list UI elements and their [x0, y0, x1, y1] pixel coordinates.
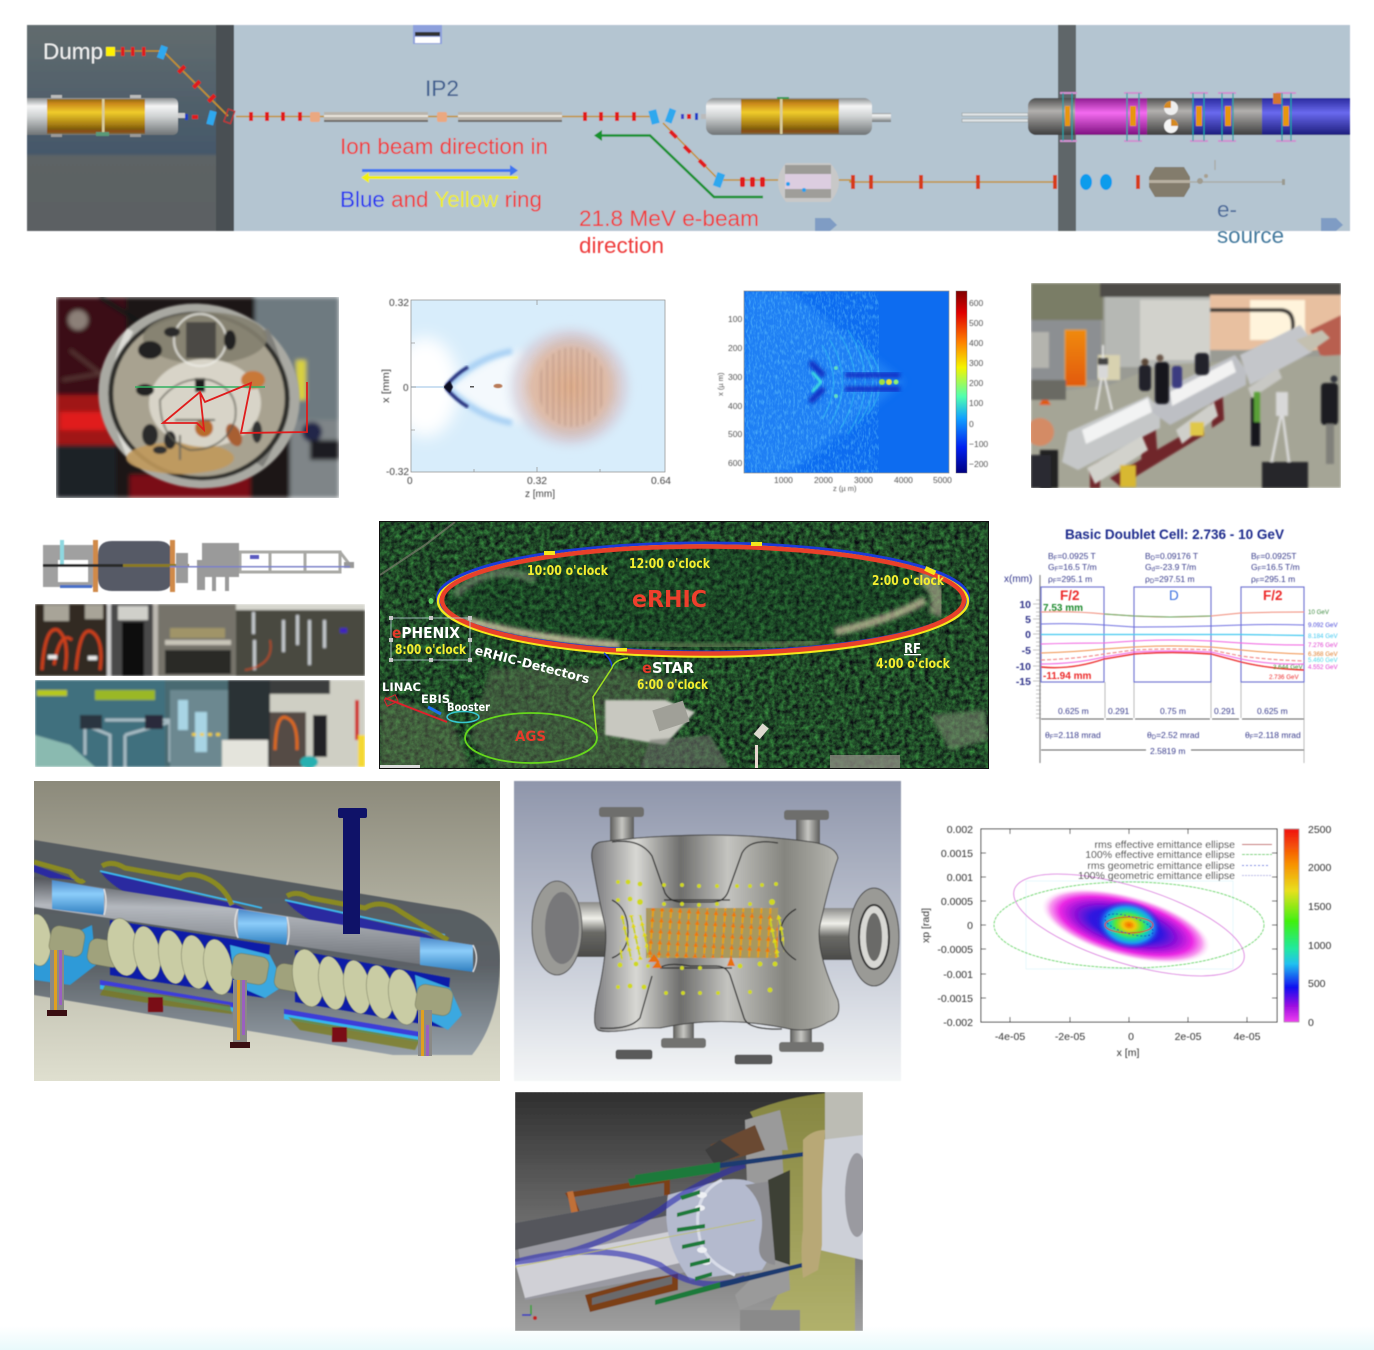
- dimension labels: θ: [1045, 730, 1050, 740]
- map labels: 4:00 o'clock: [876, 657, 950, 672]
- axis labels: 300: [969, 358, 983, 368]
- cad render: magnet and collimator assembly: [515, 1092, 869, 1331]
- cavity cold mass supports: [34, 920, 462, 1050]
- magnet parameters: =295.1 m: [1260, 574, 1295, 584]
- y axis labels: 0.0005: [941, 896, 973, 908]
- chamber flange: [96, 302, 301, 490]
- field image: [744, 291, 949, 473]
- colorbar labels: 2500: [1308, 824, 1332, 836]
- magnet labels: D: [1169, 588, 1179, 603]
- cad background: [515, 1092, 863, 1331]
- axis labels: -5: [1022, 645, 1031, 657]
- superconducting gun cryostat: [778, 163, 839, 202]
- x axis labels: 4e-05: [1234, 1031, 1261, 1043]
- coupler strips: [616, 1050, 772, 1064]
- silver magnet modules: [1062, 325, 1330, 487]
- energy labels: [1269, 609, 1338, 681]
- y axis labels: 0.002: [947, 824, 973, 836]
- blue beam envelopes: [515, 1165, 745, 1284]
- magnet parameters: ρ: [1145, 574, 1150, 584]
- magnet parameters: B: [1048, 551, 1054, 561]
- icon: slide page markers: [815, 218, 1343, 231]
- cryomodule: right with magenta and blue sections: [962, 98, 1350, 135]
- axis labels: 0: [403, 383, 409, 394]
- energy labels: 10 GeV: [1308, 609, 1330, 616]
- dimension labels: [1045, 706, 1301, 756]
- x axis labels: [995, 1031, 1261, 1059]
- laser path arrows: [135, 382, 307, 433]
- axis triad icon: [522, 1305, 537, 1320]
- axis labels: 0.32: [527, 476, 547, 487]
- magnet parameters: G: [1145, 562, 1152, 572]
- orbit traces: [1041, 612, 1304, 670]
- axis labels: 3000: [854, 475, 873, 485]
- cavity cells: [23, 913, 454, 1027]
- axis labels: 100: [969, 398, 983, 408]
- bottom pale band: [0, 1326, 1374, 1350]
- magnet parameters: ρ: [1048, 574, 1053, 584]
- dimension labels: θ: [1245, 730, 1250, 740]
- axis labels: 400: [969, 338, 983, 348]
- support posts: [47, 950, 432, 1056]
- y axis labels: -0.0015: [937, 993, 973, 1005]
- dimension labels: 0.291: [1214, 706, 1236, 716]
- axis labels: x [mm]: [381, 369, 392, 403]
- cad render: crab cavity with field vectors: [514, 781, 901, 1081]
- dimension labels: F: [1250, 735, 1254, 741]
- axis labels: [716, 298, 988, 493]
- label: Dump: Dump: [43, 39, 103, 64]
- gray structure behind: [705, 1092, 869, 1331]
- e-beam transport line: [663, 123, 1057, 189]
- label: e-source: e-: [1217, 197, 1237, 222]
- label: direction: direction: [579, 233, 664, 258]
- axis labels: 2000: [814, 475, 833, 485]
- schematic background: [27, 25, 1350, 231]
- dimension labels: 0.625 m: [1058, 706, 1089, 716]
- dimension labels: F: [1050, 735, 1054, 741]
- dimension labels: 2.5819 m: [1150, 746, 1185, 756]
- vessel: [98, 541, 172, 591]
- hall panorama: [35, 680, 365, 768]
- axis labels: 10: [1019, 599, 1031, 611]
- plot frame and ticks: [981, 829, 1277, 1022]
- ring: yellow: [438, 546, 968, 656]
- cad background: [34, 781, 500, 1081]
- map labels: AGS: [515, 729, 546, 745]
- magnet parameters: =16.5 T/m: [1058, 562, 1097, 572]
- energy labels: 7.276 GeV: [1308, 642, 1338, 649]
- axis labels: 500: [969, 318, 983, 328]
- colorbar labels: 2000: [1308, 862, 1332, 874]
- magnet parameters: F: [1054, 556, 1058, 562]
- x axis labels: 0: [1128, 1031, 1134, 1043]
- map labels: LINAC: [382, 680, 421, 694]
- ring: red: [442, 546, 964, 654]
- label: IP2: IP2: [425, 76, 459, 101]
- y axis labels: -0.0005: [937, 944, 973, 956]
- beam pipe: [515, 1195, 687, 1300]
- cavity body: [592, 835, 839, 1032]
- label: blue and yellow ring: Blue and Yellow ring: [340, 187, 542, 212]
- photo: beamline installation hall: [1026, 283, 1341, 488]
- axis labels: 600: [969, 298, 983, 308]
- colorbar labels: 1500: [1308, 901, 1332, 913]
- side ports: [532, 881, 899, 986]
- axis labels: 200: [969, 378, 983, 388]
- map labels: [382, 557, 950, 745]
- chart: simulation field map with colorbar: [716, 291, 988, 493]
- axis labels: −100: [969, 439, 988, 449]
- x axis labels: x [m]: [1117, 1047, 1139, 1059]
- legend: rms effective emittance ellipse: [1095, 839, 1235, 851]
- magnet parameters: F: [1256, 579, 1260, 585]
- axis labels: 100: [728, 314, 742, 324]
- density image: [391, 300, 665, 472]
- axis labels: 400: [728, 401, 742, 411]
- frame and ticks: [411, 300, 665, 472]
- injector line and AGS: [384, 653, 628, 763]
- chart title: Basic Doublet Cell: 2.736 - 10 GeV: [1065, 527, 1284, 542]
- map labels: 6:00 o'clock: [637, 678, 708, 693]
- axis labels: 5000: [933, 475, 952, 485]
- magnet parameters: B: [1251, 551, 1257, 561]
- y axis labels: 0.0015: [941, 848, 973, 860]
- y axis labels: -0.002: [943, 1017, 973, 1029]
- colorbar labels: 500: [1308, 978, 1326, 990]
- yellow transparent housing: [750, 1092, 855, 1331]
- axis labels: [1016, 599, 1031, 688]
- photo: laser vacuum chamber interior: [56, 285, 339, 507]
- magnet labels: F/2: [1263, 588, 1283, 603]
- colorbar: [956, 291, 967, 473]
- y axis labels: [937, 824, 973, 1029]
- photo strip: accelerator components: [35, 604, 365, 676]
- magnet parameters: B: [1145, 551, 1151, 561]
- map labels: eSTAR: [642, 659, 694, 677]
- magnet labels: F/2: [1060, 588, 1080, 603]
- axis: [1033, 575, 1304, 763]
- axis labels: 1000: [774, 475, 793, 485]
- selection box around ePHENIX: [389, 598, 472, 662]
- energy labels: 3.644 GeV: [1273, 664, 1303, 671]
- energy labels: 8.184 GeV: [1308, 633, 1338, 640]
- legend: [1078, 839, 1272, 882]
- arrows: blue and yellow ring directions: [361, 165, 518, 183]
- chart: plasma wakefield density map: [381, 298, 671, 500]
- axis labels: 200: [728, 343, 742, 353]
- colorbar labels: 1000: [1308, 940, 1332, 952]
- colorbar labels: [1308, 824, 1332, 1029]
- magnet parameters: ρ: [1251, 574, 1256, 584]
- legend: 100% geometric emittance ellipse: [1078, 870, 1235, 882]
- energy labels: 4.552 GeV: [1308, 664, 1338, 671]
- magnet parameters: G: [1048, 562, 1055, 572]
- magnet parameters: D: [1150, 579, 1155, 585]
- axis labels: x (µ m): [716, 372, 725, 396]
- map labels: 10:00 o'clock: [527, 564, 608, 579]
- axis labels: [381, 298, 671, 500]
- label: e-beam direction: 21.8 MeV e-beam: [579, 206, 759, 231]
- cavity cut outlines: [600, 841, 796, 1029]
- y axis title: xp [rad]: [920, 908, 932, 943]
- energy labels: 2.736 GeV: [1269, 674, 1299, 681]
- chart: basic doublet cell orbit plot: [1004, 527, 1338, 763]
- dimension labels: 0.625 m: [1257, 706, 1288, 716]
- x axis labels: -4e-05: [995, 1031, 1025, 1043]
- frame: [744, 291, 949, 473]
- cryomodule: center: [701, 97, 891, 135]
- beamline stands: [1038, 396, 1226, 488]
- helium return tube: [34, 877, 476, 972]
- magnet labels: -11.94 mm: [1043, 671, 1091, 682]
- energy labels: 6.368 GeV: [1308, 651, 1338, 658]
- aerial photo terrain: [380, 522, 988, 769]
- axis labels: 0.32: [389, 298, 409, 309]
- upstream assembly: [43, 540, 189, 592]
- magnet parameters: D: [1151, 556, 1156, 562]
- x axis labels: -2e-05: [1055, 1031, 1085, 1043]
- magnet labels: 7.53 mm: [1043, 603, 1083, 614]
- axis labels: 600: [728, 458, 742, 468]
- y axis labels: -0.001: [943, 969, 973, 981]
- magnet parameters: =0.09176 T: [1155, 551, 1198, 561]
- magnet parameters: =-23.9 T/m: [1155, 562, 1196, 572]
- magnet parameters: F: [1258, 567, 1262, 573]
- axis labels: −200: [969, 459, 988, 469]
- axis labels: -10: [1016, 661, 1031, 673]
- green correctors: [628, 1150, 820, 1305]
- dimension labels: =2.118 mrad: [1053, 730, 1101, 740]
- label: e-source: [1217, 197, 1284, 248]
- cad background: [514, 781, 901, 1081]
- chart: transverse phase space emittance: [920, 824, 1332, 1059]
- icon: toolbar widget: [413, 25, 442, 44]
- energy labels: 5.460 GeV: [1308, 657, 1338, 664]
- map: eRHIC aerial ring layout: [379, 521, 989, 769]
- axis labels: 0: [407, 476, 413, 487]
- axis labels: 0: [1025, 629, 1031, 641]
- photo background: [56, 297, 339, 498]
- energy labels: 9.092 GeV: [1308, 622, 1338, 629]
- cad render: SRF cavity cryomodule cutaway: [23, 781, 500, 1081]
- arrow: e-beam direction: [594, 130, 763, 197]
- magnet parameters: =0.0925T: [1260, 551, 1296, 561]
- label: x(mm): x(mm): [1004, 574, 1032, 585]
- axis labels: 4000: [894, 475, 913, 485]
- axis labels: -0.32: [386, 467, 409, 478]
- tan plate: [802, 1130, 825, 1278]
- magnet parameters: =16.5 T/m: [1261, 562, 1300, 572]
- magnet parameters: [1048, 551, 1300, 585]
- axis labels: z [mm]: [525, 489, 555, 500]
- conical flange and ring: [666, 1170, 790, 1280]
- magnet parameters: G: [1251, 562, 1258, 572]
- legend: rms geometric emittance ellipse: [1087, 860, 1235, 872]
- label: e-source: source: [1217, 223, 1284, 248]
- magnet parameters: =295.1 m: [1057, 574, 1092, 584]
- axis labels: 0: [969, 419, 974, 429]
- x axis labels: 2e-05: [1175, 1031, 1202, 1043]
- magnet labels: [1043, 588, 1283, 682]
- beam pipe and frame: [240, 552, 350, 572]
- cryomodule: left: [10, 95, 185, 137]
- field vectors: [616, 880, 784, 995]
- dimension lines: [1041, 719, 1304, 750]
- legend: 100% effective emittance ellipse: [1085, 849, 1235, 861]
- diagram: cryomodule side view drawing: [43, 540, 354, 592]
- dimension labels: 0.75 m: [1160, 706, 1186, 716]
- axis labels: z (µ m): [833, 484, 857, 493]
- map labels: 12:00 o'clock: [629, 557, 710, 572]
- hall walls and floor: [1026, 283, 1341, 488]
- axis labels: 500: [728, 429, 742, 439]
- magnet boxes: [1041, 587, 1304, 682]
- magnet parameters: =297.51 m: [1154, 574, 1195, 584]
- label: ion beam direction: Ion beam direction in: [340, 134, 548, 159]
- e-source and lens elements: [1080, 160, 1285, 197]
- corrector magnets on right section: [1058, 92, 1296, 142]
- upper shields: [34, 862, 448, 943]
- dimension labels: =2.52 mrad: [1156, 730, 1200, 740]
- colorbar labels: 0: [1308, 1017, 1314, 1029]
- aerial photo frame: [379, 521, 989, 769]
- people and survey tripods: [1031, 345, 1338, 488]
- ring: blue: [438, 544, 968, 652]
- magnet parameters: F: [1053, 579, 1057, 585]
- map labels: RF: [904, 642, 921, 657]
- axis labels: 300: [728, 372, 742, 382]
- map labels: 8:00 o'clock: [395, 643, 466, 658]
- photo strip: accelerator hall panorama: [35, 680, 365, 768]
- panel: accelerator beamline schematic: [10, 25, 1350, 258]
- photo sections: [35, 604, 365, 676]
- map labels: eRHIC-Detectors: [473, 642, 591, 686]
- copper coils: [565, 1176, 678, 1312]
- map labels: 2:00 o'clock: [872, 574, 944, 589]
- dump beamline: [106, 45, 235, 126]
- colorbar: [1284, 829, 1299, 1022]
- ring markers: [544, 542, 936, 652]
- magnet parameters: d: [1152, 567, 1155, 573]
- y axis labels: 0.001: [947, 872, 973, 884]
- downstream assembly: [176, 543, 239, 591]
- dimension labels: =2.118 mrad: [1253, 730, 1301, 740]
- map labels: ePHENIX: [392, 624, 460, 642]
- density and ellipses: [981, 829, 1277, 1022]
- map labels: eRHIC: [632, 587, 707, 613]
- vertical chimney: [338, 808, 367, 934]
- dimension labels: 0.291: [1108, 706, 1130, 716]
- y axis labels: 0: [967, 920, 973, 932]
- magnet parameters: F: [1055, 567, 1059, 573]
- IP2 straight section beamline: [236, 108, 698, 125]
- axis labels: -15: [1016, 676, 1031, 688]
- magnet parameters: F: [1257, 556, 1261, 562]
- inner beam region: [646, 908, 778, 958]
- axis labels: 0.64: [651, 476, 671, 487]
- axis labels: 5: [1025, 614, 1031, 626]
- map labels: EBIS: [421, 692, 450, 706]
- dimension labels: θ: [1147, 730, 1152, 740]
- dimension labels: D: [1152, 735, 1157, 741]
- map labels: Booster: [447, 700, 490, 714]
- magnet parameters: =0.0925 T: [1057, 551, 1096, 561]
- top and bottom ports: [599, 807, 829, 1052]
- cutaway vessel: [34, 840, 500, 1055]
